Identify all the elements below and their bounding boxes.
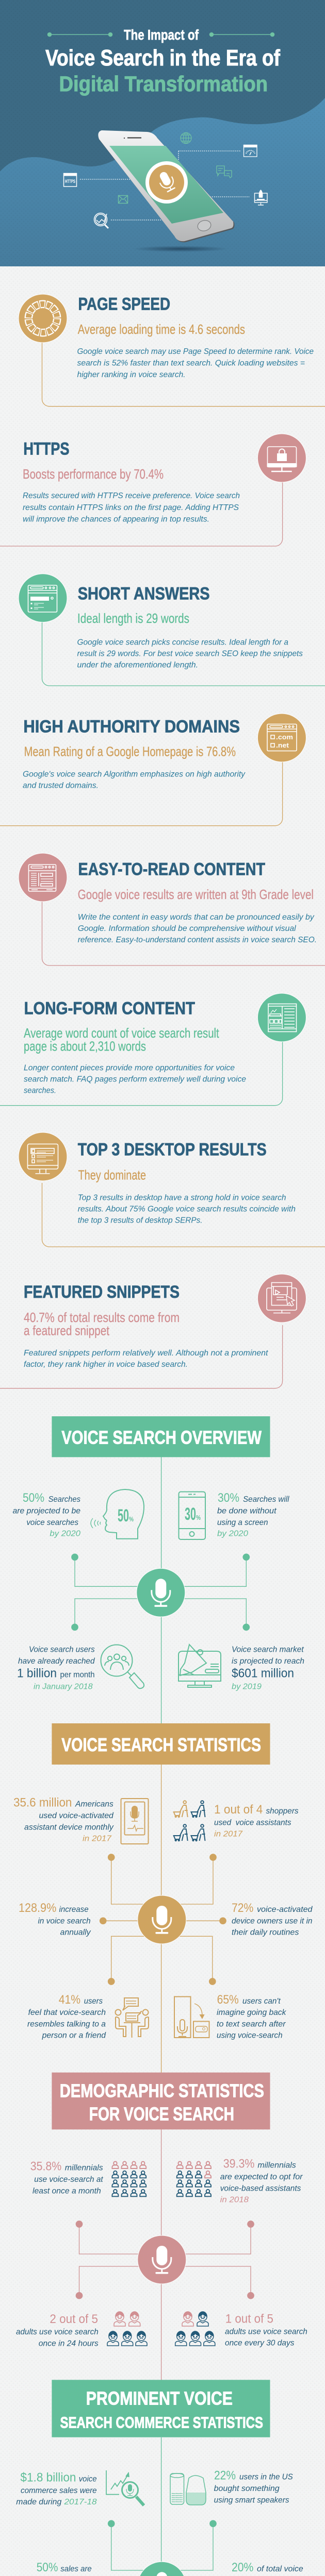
panel: short answers (19, 574, 325, 686)
subheading: Mean Rating of a Google Homepage is 76.8% (24, 743, 236, 759)
stat: 30 percent without a screen: 30% (218, 1491, 239, 1505)
panel: demographic statistics (16, 2073, 307, 2380)
icon: domain browser: .com (276, 733, 293, 741)
stat: 20 percent grocery: of total voice (257, 2565, 303, 2573)
icon: snippet monitor (257, 1274, 306, 1323)
stat: 1 billion users: have already reached (18, 1657, 95, 1666)
icon: faces right (175, 2312, 215, 2346)
stat: 1 out of 5 adults: once every 30 days (225, 2339, 294, 2348)
body text: searches. (24, 1086, 56, 1095)
stat: 39.3 percent millennials: are expected to opt for (220, 2173, 303, 2181)
body text: search match. FAQ pages perform extremely well during voice (24, 1075, 246, 1083)
stat: 1 billion users: Voice search users (29, 1646, 95, 1654)
stat: 1 out of 5 adults (225, 2312, 307, 2348)
stat: 35.8 percent millennials: use voice-search at (34, 2175, 103, 2184)
icon: hub microphone (138, 2562, 186, 2576)
stat: 50 percent voice searches: are projected to be (12, 1506, 80, 1515)
subheading: Average loading time is 4.6 seconds (78, 321, 245, 337)
stat: 2 out of 5 adults: 2 out of 5 (50, 2312, 98, 2326)
connector (0, 482, 283, 546)
icon: analytics magnifier (94, 213, 108, 228)
stat: 65 percent users (217, 1993, 286, 2040)
panel: page speed (19, 294, 325, 406)
heading: SHORT ANSWERS (78, 584, 210, 603)
body text: factor, they rank higher in voice based search. (24, 1360, 188, 1369)
stat: 128.9 percent increase (19, 1901, 91, 1937)
stat: 601 million market (232, 1646, 304, 1691)
stat: 41 percent users (27, 1993, 106, 2040)
icon: people grid right (177, 2162, 211, 2196)
title: the impact of (47, 27, 274, 43)
panel: voice search overview (12, 1416, 304, 1723)
icon: people magnifier (101, 1645, 144, 1688)
stat: 1 out of 4 shoppers: in 2017 (214, 1829, 243, 1838)
icon: voice instead of text (174, 1997, 209, 2038)
subheading: They dominate (78, 1167, 146, 1182)
stat: 65 percent users: imagine going back (217, 2008, 286, 2017)
stat: 35.8 percent millennials: least once a month (32, 2187, 101, 2195)
icon: globe (181, 133, 191, 143)
connector (42, 622, 325, 686)
stat: 601 million market: Voice search market (232, 1646, 304, 1654)
stat: 50 percent voice searches (12, 1491, 80, 1538)
stat: 35.6 million americans: 35.6 million (13, 1796, 72, 1810)
subheading (24, 1310, 180, 1338)
body text (24, 1063, 246, 1095)
stat: 128.9 percent increase: 128.9% (19, 1901, 56, 1915)
connector (42, 902, 325, 965)
connector (0, 1042, 283, 1106)
icon: phone microphone (145, 161, 188, 204)
body text: result is 29 words. For best voice search SEO keep the snippets (77, 649, 303, 658)
stat: 35.6 million americans: Americans (75, 1800, 113, 1809)
connector (0, 1325, 283, 1388)
body text: Google. Information should be comprehensive without visual (78, 924, 296, 933)
icon: people grid left (112, 2162, 146, 2196)
subheading: Boosts performance by 70.4% (23, 466, 164, 482)
center line (161, 1765, 162, 2073)
body text: will improve the chances of appearing in top results. (23, 515, 209, 524)
subheading: Average word count of voice search result (24, 1025, 219, 1041)
body text: Featured snippets perform relatively well. Although not a prominent (24, 1349, 268, 1358)
stat: 1 out of 5 adults: 1 out of 5 (225, 2312, 273, 2326)
stat: 35.8 percent millennials: millennials (65, 2163, 103, 2172)
stat: 2 out of 5 adults: adults use voice search (16, 2328, 99, 2336)
heading: HTTPS (23, 439, 70, 459)
stat: 30 percent without a screen: using a screen (217, 1518, 268, 1527)
stat: 50 percent sales: sales are (60, 2565, 92, 2573)
connector tree (72, 1554, 250, 1630)
connector tree (76, 2221, 254, 2299)
stat: 2 out of 5 adults (16, 2312, 99, 2348)
body text: and trusted domains. (23, 782, 99, 790)
body text: Top 3 results in desktop have a strong hold in voice search (78, 1193, 286, 1202)
icon: https browser (64, 173, 76, 187)
stat: 41 percent users: person or a friend (42, 2031, 106, 2040)
connector (0, 761, 283, 826)
stat: 128.9 percent increase: increase (59, 1905, 89, 1914)
heading: TOP 3 DESKTOP RESULTS (78, 1140, 267, 1159)
body text: under the aforementioned length. (77, 660, 198, 669)
stat: 22 percent users (214, 2469, 293, 2504)
icon: mail (119, 196, 128, 203)
body text (78, 1193, 296, 1225)
icon: faces left (107, 2312, 147, 2346)
stat: 65 percent users: to text search after (217, 2020, 286, 2028)
subheading: a featured snippet (24, 1323, 110, 1338)
icon: hub microphone (138, 2235, 186, 2284)
body text: results contain HTTPS links on the first page. Adding HTTPS (23, 503, 239, 512)
stat: 22 percent users: using smart speakers (214, 2496, 289, 2504)
title: digital transformation: Digital Transformation (59, 72, 268, 96)
stat: 22 percent users: 22% (214, 2469, 236, 2483)
connector tree (100, 1854, 226, 1985)
panel: voice search statistics (13, 1723, 313, 2073)
stat: 35.6 million americans: used voice-activated (39, 1811, 114, 1820)
section banner: VOICE SEARCH OVERVIEW (61, 1427, 262, 1448)
stat: 1.8 billion sales: 2017-18 (63, 2498, 97, 2506)
stat: 1.8 billion sales (16, 2471, 97, 2506)
stat: 35.6 million americans: assistant device monthly (24, 1823, 114, 1832)
phone illustration (98, 130, 235, 242)
heading: HIGH AUTHORITY DOMAINS (23, 717, 240, 737)
stat: 20 percent grocery: 20% (232, 2561, 253, 2574)
subheading: 40.7% of total results come from (24, 1310, 180, 1325)
section banner (52, 1723, 270, 1765)
stat: 35.6 million americans: in 2017 (83, 1834, 112, 1843)
body text (77, 347, 314, 379)
stat: 601 million market: is projected to reach (232, 1657, 304, 1666)
body text (24, 1349, 268, 1369)
stat: 72 percent device owners: device owners use it in (232, 1917, 313, 1925)
stat: 1 billion users (17, 1646, 95, 1691)
body text: Google's voice search Algorithm emphasizes on high authority (23, 770, 246, 779)
stat: 50 percent voice searches: Searches (48, 1495, 80, 1504)
heading: EASY-TO-READ CONTENT (78, 859, 265, 879)
stat: 39.3 percent millennials: millennials (257, 2161, 296, 2170)
stat: 35.8 percent millennials: 35.8% (30, 2159, 61, 2173)
heading: LONG-FORM CONTENT (24, 998, 195, 1018)
subheading (24, 1025, 219, 1054)
section banner (52, 1416, 270, 1457)
icon: hub microphone (138, 1895, 186, 1944)
panel: https (0, 434, 306, 546)
panel: high authority domains (0, 714, 306, 826)
icon: results monitor (19, 1132, 67, 1181)
icon: megaphone monitor (178, 1645, 221, 1687)
dotted connectors (80, 151, 250, 222)
stat: 65 percent users: 65% (217, 1993, 239, 2007)
stat: 39.3 percent millennials: voice-based assistants (220, 2184, 301, 2193)
body text (78, 913, 317, 944)
stat: 1 out of 4 shoppers (214, 1803, 299, 1838)
stat: 30 percent without a screen: by 2020 (217, 1530, 248, 1538)
icon: phone 30 percent (178, 1492, 205, 1539)
stat: 1 billion users: in January 2018 (34, 1682, 93, 1691)
stat: 1.8 billion sales: voice (79, 2475, 97, 2484)
body text: Write the content in easy words that can be pronounced easily by (78, 913, 315, 922)
header panel (0, 0, 325, 266)
body text: search is 52% faster than text search. Quick loading websites = (77, 359, 305, 368)
icon: search browser (19, 574, 67, 622)
stat: 1.8 billion sales: commerce sales were (21, 2486, 97, 2495)
section banner (52, 2073, 270, 2129)
heading: FEATURED SNIPPETS (24, 1282, 180, 1302)
body text (23, 770, 246, 790)
body text: Google voice search picks concise results. Ideal length for a (77, 638, 288, 647)
stat: 41 percent users: 41% (59, 1993, 80, 2007)
stat: 128.9 percent increase: annually (60, 1928, 91, 1937)
panel: long-form content (0, 993, 306, 1106)
stat: 65 percent users: using voice-search (217, 2031, 283, 2040)
body text: Longer content pieces provide more opportunities for voice (24, 1063, 235, 1072)
body text (23, 492, 240, 524)
stat: 1 billion users: per month (60, 1671, 95, 1680)
body text: Results secured with HTTPS receive preference. Voice search (23, 492, 240, 500)
icon: speaking head: 50 (118, 1506, 129, 1526)
stat: 1.8 billion sales: made during (16, 2498, 61, 2506)
stat: 50 percent voice searches: voice searches (26, 1518, 78, 1527)
icon: growth chart magnifier (106, 2470, 144, 2505)
body text: reference. Easy-to-understand content assists in voice search SEO. (78, 936, 317, 944)
stat: 35.8 percent millennials (30, 2159, 103, 2195)
stat: 30 percent without a screen (217, 1491, 289, 1538)
section banner: VOICE SEARCH STATISTICS (61, 1734, 261, 1755)
icon: conversation at table (116, 1998, 149, 2038)
icon: speaking head (91, 1489, 144, 1539)
body text: higher ranking in voice search. (77, 370, 186, 379)
icon: secure monitor (257, 434, 306, 482)
icon: loading ring (19, 294, 67, 343)
stat: 1.8 billion sales: $1.8 billion (20, 2471, 76, 2485)
center line (161, 2129, 162, 2380)
section banner: FOR VOICE SEARCH (89, 2104, 234, 2125)
stat: 35.6 million americans (13, 1796, 114, 1843)
connector (42, 1183, 325, 1247)
icon: domain browser (257, 714, 306, 762)
title: voice search in the era of: Voice Search in the Era of (45, 45, 280, 71)
stat: 72 percent device owners: voice-activated (257, 1905, 313, 1914)
stat: 2 out of 5 adults: once in 24 hours (39, 2339, 99, 2348)
stat: 50 percent voice searches: by 2020 (50, 1530, 80, 1538)
title: the impact of: The Impact of (124, 27, 199, 43)
stat: 30 percent without a screen: be done without (217, 1506, 277, 1515)
stat: 50 percent voice searches: 50% (23, 1491, 44, 1505)
stat: 22 percent users: users in the US (239, 2473, 293, 2482)
icon: phone 30 percent: 30 (185, 1504, 196, 1524)
stat: 1 out of 4 shoppers: shoppers (266, 1807, 299, 1816)
subheading: page is about 2,310 words (24, 1038, 146, 1054)
body text: the top 3 results of desktop SERPs. (78, 1216, 202, 1225)
icon: rocket monitor (255, 190, 267, 205)
icon: https browser: HTTPS (65, 179, 75, 184)
icon: chat bubbles (217, 166, 232, 178)
body text: Google voice search may use Page Speed to determine rank. Voice (77, 347, 314, 356)
stat: 1 out of 5 adults: adults use voice search (225, 2328, 307, 2336)
stat: 50 percent sales (21, 2561, 92, 2576)
icon: speedometer browser (243, 145, 257, 157)
stat: 72 percent device owners (232, 1901, 313, 1937)
icon: voice assistant device (121, 1799, 149, 1844)
stat: 41 percent users: resembles talking to a (27, 2020, 106, 2028)
center line (161, 2437, 162, 2576)
stat: 39.3 percent millennials: in 2018 (220, 2195, 249, 2204)
stat: 72 percent device owners: their daily routines (232, 1928, 299, 1937)
panel: easy-to-read content (19, 853, 325, 965)
section banner (52, 2380, 270, 2437)
phone shadow (133, 246, 228, 252)
section banner: DEMOGRAPHIC STATISTICS (60, 2080, 264, 2102)
stat: 50 percent sales: 50% (37, 2561, 58, 2574)
icon: phone 30 percent: % (196, 1514, 201, 1521)
center line (161, 1457, 162, 1723)
panel: featured snippets (0, 1274, 306, 1388)
icon: smart speakers (170, 2473, 206, 2505)
icon: shoppers (174, 1801, 205, 1841)
stat: 72 percent device owners: 72% (232, 1901, 253, 1915)
stat: 65 percent users: users can't (242, 1997, 281, 2006)
panel: top 3 desktop results (19, 1132, 325, 1247)
stat: 601 million market: $601 million (232, 1667, 294, 1681)
section banner: SEARCH COMMERCE STATISTICS (60, 2414, 263, 2432)
stat: 20 percent grocery (231, 2561, 311, 2576)
section banner: PROMINENT VOICE (86, 2388, 233, 2409)
icon: speaking head: % (129, 1515, 134, 1523)
icon: article browser (19, 853, 67, 902)
stat: 1 out of 4 shoppers: used voice assistants (214, 1818, 291, 1827)
stat: 39.3 percent millennials (220, 2157, 303, 2204)
body text (77, 638, 303, 669)
body text: results. About 75% Google voice search results coincide with (78, 1205, 296, 1214)
stat: 41 percent users: users (84, 1997, 103, 2006)
connector tree (100, 2520, 227, 2576)
icon: long web page (257, 993, 306, 1042)
stat: 41 percent users: feel that voice-search (28, 2008, 106, 2017)
stat: 30 percent without a screen: Searches will (243, 1495, 289, 1504)
icon: domain browser: .net (276, 741, 289, 749)
subheading: Ideal length is 29 words (77, 611, 189, 626)
stat: 1 out of 4 shoppers: 1 out of 4 (214, 1803, 263, 1817)
stat: 22 percent users: bought something (214, 2484, 280, 2493)
stat: 39.3 percent millennials: 39.3% (223, 2157, 254, 2171)
connector (42, 343, 325, 406)
panel: prominent voice search commerce statistics (15, 2380, 311, 2576)
stat: 128.9 percent increase: in voice search (38, 1917, 91, 1925)
stat: 601 million market: by 2019 (232, 1682, 262, 1691)
heading: PAGE SPEED (78, 295, 170, 314)
stat: 1 billion users: 1 billion (17, 1667, 57, 1681)
icon: hub microphone (137, 1568, 185, 1617)
